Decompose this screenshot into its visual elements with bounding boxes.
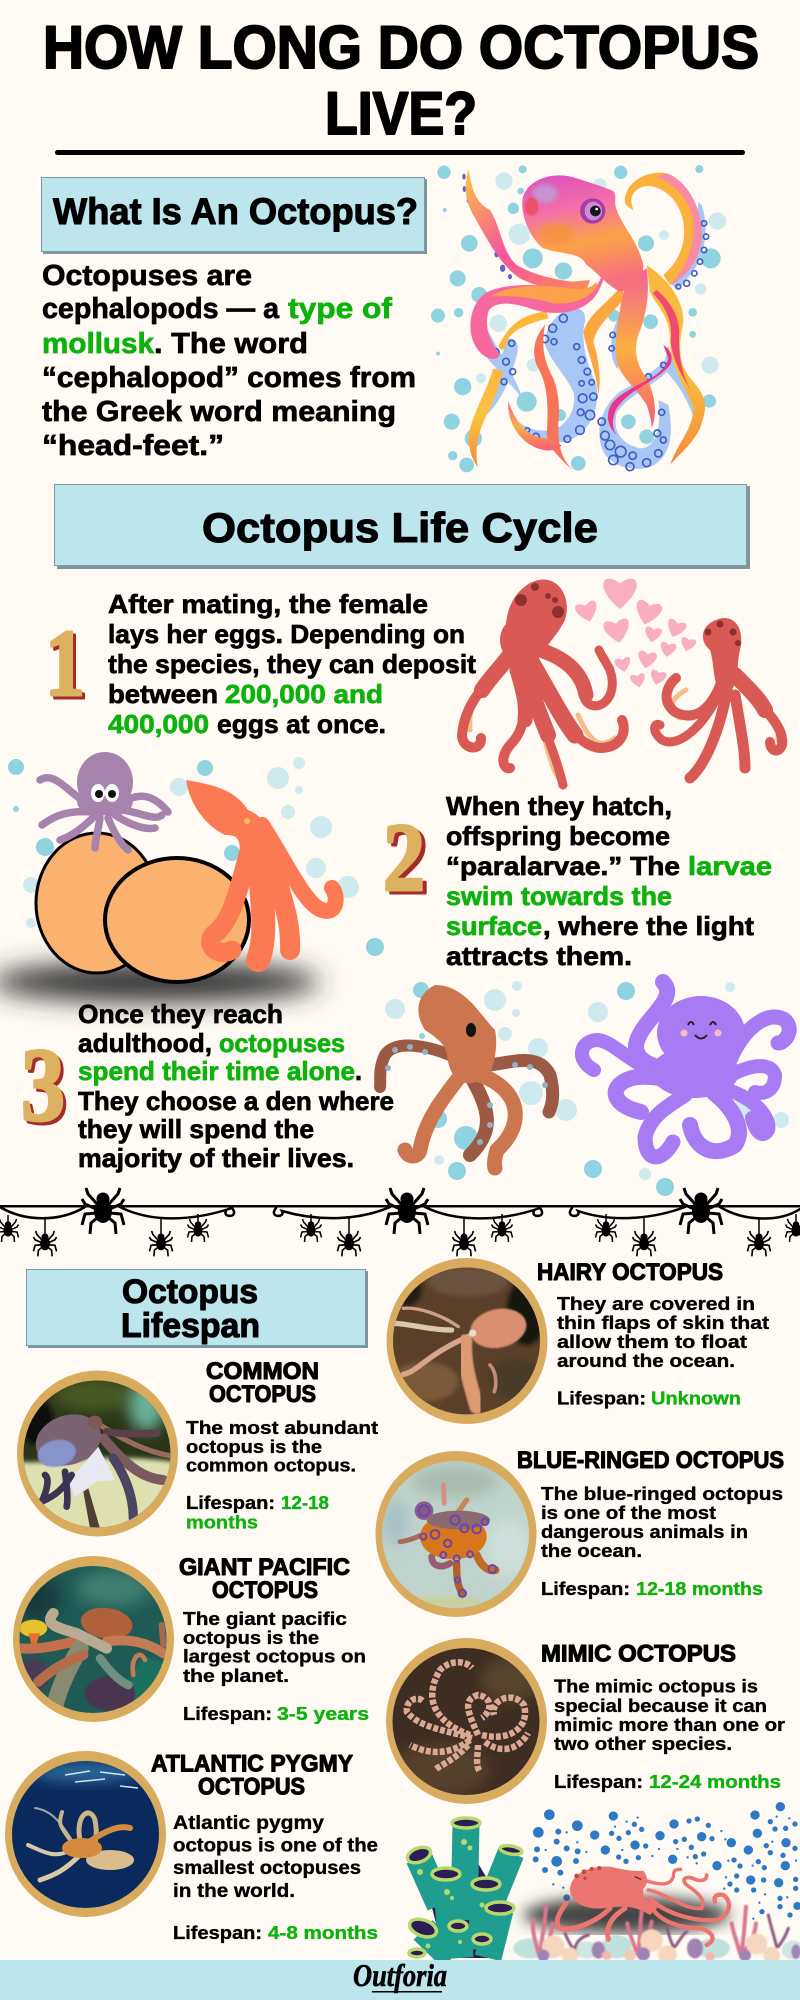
text block: giant pacific octopus: The giant pacific (183, 1609, 347, 1629)
title (43, 14, 759, 147)
text block: step 2: surface (446, 911, 542, 941)
text block: mimic octopus: 12-24 months (649, 1772, 781, 1792)
panel: what is an octopus heading (42, 178, 427, 254)
text block: hairy octopus: Unknown (651, 1388, 741, 1408)
title: LIVE? (325, 80, 477, 147)
footer bar with Outforia logo (0, 1957, 800, 2000)
text block: mimic octopus: mimic more than one or (554, 1715, 785, 1735)
text block: step 1: After mating, the female (108, 589, 428, 619)
text block: atlantic pygmy octopus: smallest octopuses (173, 1858, 361, 1879)
suckers (493, 221, 709, 471)
text block: blue-ringed octopus: Lifespan: (541, 1579, 630, 1599)
text block: step 3: majority of their lives. (78, 1143, 354, 1173)
text block: atlantic pygmy octopus: OCTOPUS (198, 1774, 305, 1800)
text block: octopus definition: mollusk (42, 328, 155, 360)
text block: step 3: spend their time alone (78, 1056, 355, 1086)
text block: hairy octopus: thin flaps of skin that (557, 1313, 769, 1333)
text block: giant pacific octopus: 3-5 years (277, 1704, 369, 1724)
text block: step 1 (108, 589, 476, 739)
text block: mimic octopus: two other species. (554, 1734, 732, 1754)
icon: salmon octopus, reef and blue dots (510, 1802, 800, 1964)
text block: common octopus: The most abundant (186, 1418, 378, 1438)
panel: life cycle heading: Octopus Life Cycle (202, 504, 598, 551)
text block: common octopus: OCTOPUS (209, 1381, 316, 1408)
text block: octopus definition: “cephalopod” comes from (42, 362, 416, 394)
text block: step 3: they will spend the (78, 1114, 314, 1144)
photo: giant pacific octopus (13, 1556, 174, 1722)
text block: step 2: swim towards the (446, 881, 672, 911)
text block: blue-ringed octopus: dangerous animals in (541, 1522, 748, 1542)
photo: blue-ringed octopus (375, 1450, 537, 1617)
purple octopus (582, 982, 789, 1157)
icon: brown octopus and purple octopus with bubbles (380, 981, 789, 1196)
text block: blue-ringed octopus: is one of the most (541, 1503, 716, 1523)
step 1 number: 1 (48, 613, 88, 719)
text block: atlantic pygmy octopus: Lifespan: (173, 1923, 262, 1943)
text block: giant pacific octopus: octopus is the (183, 1628, 319, 1648)
text block: mimic octopus: special because it can (554, 1696, 767, 1716)
text block: blue-ringed octopus: The blue-ringed octopus (541, 1484, 783, 1504)
panel: octopus lifespan heading (26, 1270, 368, 1348)
text block: step 2 (446, 791, 772, 971)
text block: step 1: 400,000 (108, 709, 209, 739)
text block: mimic octopus: Lifespan: (554, 1772, 643, 1792)
step 2 number: 2 (383, 804, 425, 911)
text block: hairy octopus: allow them to float (557, 1332, 747, 1352)
text block: octopus definition: cephalopods — a (42, 293, 280, 325)
text block: step 1: between (108, 679, 218, 709)
text block: octopus definition: type of (288, 293, 392, 325)
text block: step 3: . (355, 1056, 362, 1086)
text block: hairy octopus (537, 1259, 769, 1408)
text block: step 3: adulthood, (78, 1028, 212, 1058)
text block: blue-ringed octopus: 12-18 months (636, 1579, 763, 1599)
text block: step 1: lays her eggs. Depending on (108, 619, 465, 649)
purple octopus (40, 778, 168, 850)
text block: atlantic pygmy octopus: 4-8 months (268, 1923, 378, 1943)
text block: step 3: octopuses (219, 1028, 345, 1058)
spider garland divider (0, 1188, 800, 1256)
mantle and body (522, 175, 643, 292)
panel: life cycle heading (54, 484, 750, 569)
text block: step 3: They choose a den where (78, 1086, 394, 1116)
text block: step 2: When they hatch, (446, 791, 672, 821)
text block: octopus definition (42, 260, 416, 462)
title: HOW LONG DO OCTOPUS (43, 14, 759, 81)
text block: atlantic pygmy octopus: in the world. (173, 1881, 295, 1902)
text block: giant pacific octopus: the planet. (183, 1666, 289, 1686)
text block: giant pacific octopus: Lifespan: (183, 1704, 272, 1724)
text block: blue-ringed octopus: BLUE-RINGED OCTOPUS (517, 1447, 784, 1474)
photo: hairy octopus (386, 1258, 548, 1424)
text block: giant pacific octopus: GIANT PACIFIC (179, 1554, 350, 1581)
photo: atlantic pygmy octopus (5, 1751, 166, 1917)
text block: octopus definition: “head-feet.” (42, 430, 224, 462)
text block: mimic octopus: MIMIC OCTOPUS (541, 1640, 736, 1668)
icon: two red octopuses with hearts (462, 579, 782, 785)
text block: atlantic pygmy octopus: Atlantic pygmy (173, 1813, 324, 1834)
text block: atlantic pygmy octopus: octopus is one of the (173, 1836, 378, 1856)
step 2 number: 2 (387, 807, 429, 914)
panel: octopus lifespan heading: Octopus (122, 1273, 258, 1311)
text block: atlantic pygmy octopus (151, 1750, 378, 1943)
text block: hairy octopus: Lifespan: (557, 1388, 646, 1408)
text block: step 3: Once they reach (78, 999, 283, 1029)
text block: common octopus (186, 1358, 378, 1532)
text block: common octopus: common octopus. (186, 1456, 356, 1476)
text block: common octopus: Lifespan: (186, 1493, 275, 1513)
text block: mimic octopus (541, 1640, 785, 1792)
text block: blue-ringed octopus: the ocean. (541, 1541, 642, 1561)
text block: step 2: offspring become (446, 821, 670, 851)
text block: step 1: the species, they can deposit (108, 649, 476, 679)
photo: common octopus (17, 1370, 178, 1538)
text block: step 2: , where the light (543, 911, 754, 941)
text block: common octopus: 12-18 (281, 1493, 329, 1513)
text block: octopus definition: the Greek word meaning (42, 396, 396, 428)
text block: atlantic pygmy octopus: ATLANTIC PYGMY (151, 1750, 353, 1778)
step 3 number: 3 (24, 1029, 68, 1146)
text block: step 2: “paralarvae.” The (446, 851, 680, 881)
text block: octopus definition: . The word (154, 328, 308, 360)
text block: step 2: attracts them. (446, 941, 632, 971)
coral octopus (211, 825, 336, 960)
brown octopus (380, 1046, 553, 1168)
text block: hairy octopus: They are covered in (557, 1294, 755, 1314)
panel: what is an octopus heading: What Is An Octopus? (53, 191, 418, 232)
text block: giant pacific octopus: largest octopus on (183, 1646, 366, 1666)
text block: step 3 (78, 999, 394, 1173)
icon: watercolor octopus with bubbles (431, 165, 726, 472)
text block: giant pacific octopus: OCTOPUS (212, 1577, 318, 1604)
warm arms (466, 169, 590, 291)
text block: step 2: larvae (688, 851, 772, 881)
footer bar with Outforia logo: Outforia (353, 1957, 447, 1993)
text block: giant pacific octopus (179, 1554, 369, 1724)
text block: step 1: eggs at once. (217, 709, 386, 739)
icon: eggs with purple and coral octopus (0, 752, 384, 1002)
step 1 number: 1 (45, 610, 85, 716)
text block: step 1: 200,000 and (225, 679, 383, 709)
panel: octopus lifespan heading: Lifespan (121, 1307, 260, 1345)
text block: blue-ringed octopus (517, 1447, 784, 1599)
text block: common octopus: octopus is the (186, 1437, 322, 1457)
text block: common octopus: months (186, 1512, 258, 1532)
step 3 number: 3 (21, 1026, 65, 1143)
text block: hairy octopus: HAIRY OCTOPUS (537, 1259, 723, 1286)
back blue arms (482, 325, 523, 400)
icon: teal tube coral (405, 1818, 523, 1958)
text block: hairy octopus: around the ocean. (557, 1351, 735, 1371)
text block: octopus definition: Octopuses are (42, 260, 252, 292)
photo: mimic octopus (386, 1638, 547, 1804)
text block: common octopus: COMMON (206, 1358, 319, 1385)
text block: mimic octopus: The mimic octopus is (554, 1676, 758, 1696)
